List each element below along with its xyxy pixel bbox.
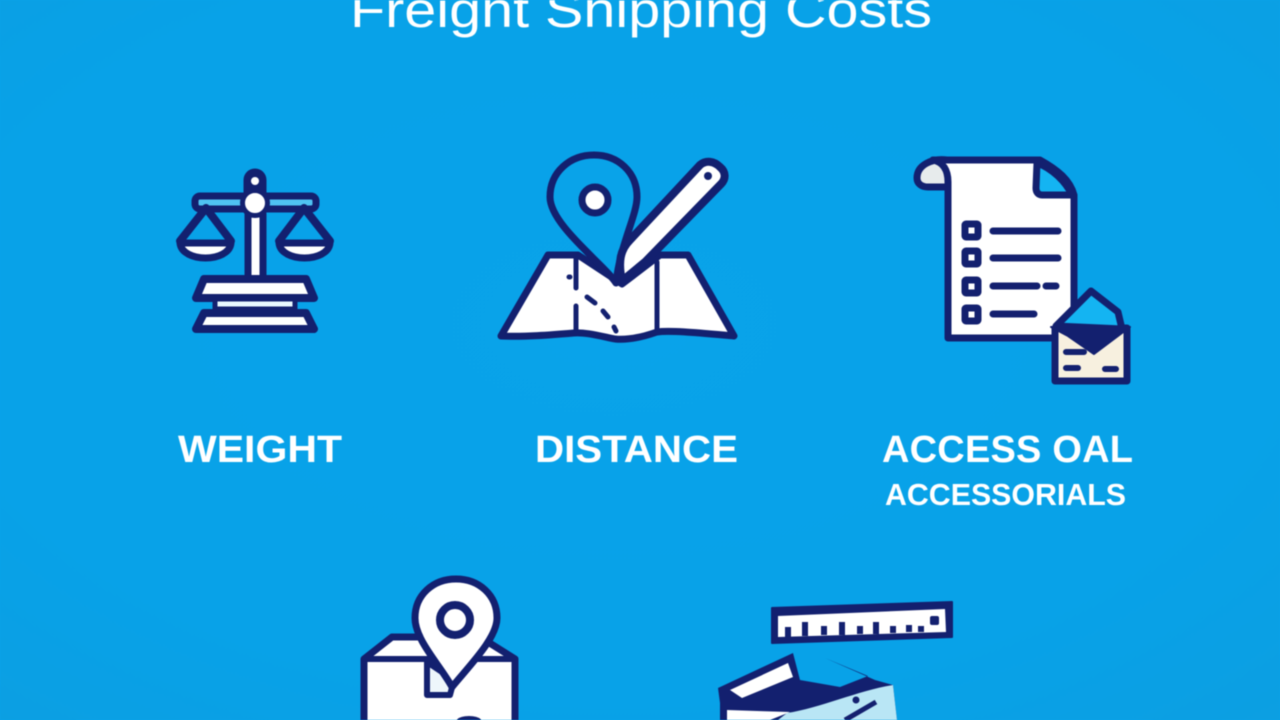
open box [718,653,897,720]
label: accessorials: ACCESSORIALS [885,477,1126,512]
icon: ruler and package [718,602,952,720]
label: weight: WEIGHT [178,429,342,471]
label: distance: DISTANCE [535,429,738,471]
icon: open envelope [1051,291,1130,381]
icon: map with pin and pencil [501,155,734,339]
icon: package with location pin [364,579,515,720]
label: accessorials garbled: ACCESS OAL [882,429,1133,471]
ruler [772,602,952,643]
icon: document checklist with envelope [917,160,1074,338]
icon: weighing scale [180,172,330,329]
